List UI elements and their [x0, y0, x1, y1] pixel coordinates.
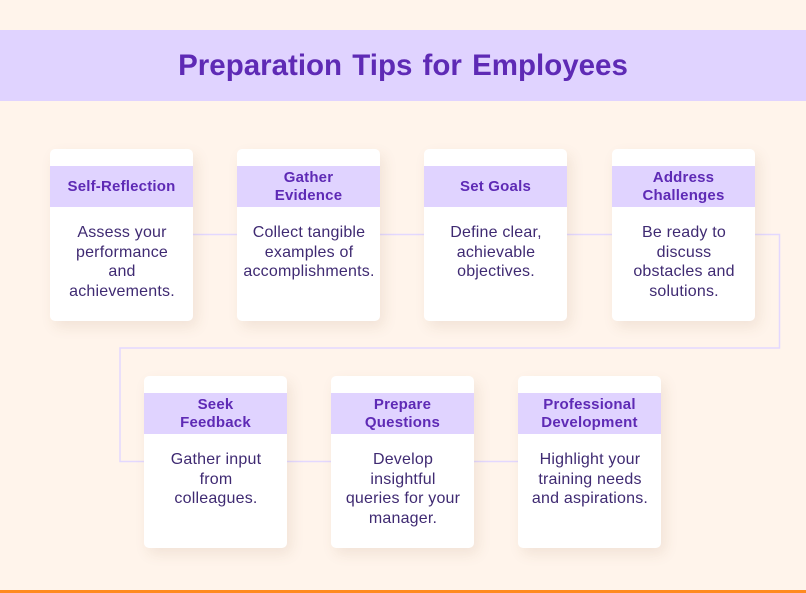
card: Seek Feedback	[144, 376, 287, 548]
card: Prepare Questions: insightful	[370, 470, 436, 488]
card: Gather Evidence	[237, 149, 380, 321]
card: Prepare Questions: manager.	[369, 510, 437, 526]
card: Seek Feedback: colleagues.	[174, 490, 258, 507]
card: Self-Reflection: performance	[76, 244, 168, 260]
card: Gather Evidence: Gather	[284, 168, 333, 186]
card: Address Challenges: Be ready to	[642, 224, 726, 241]
card: Self-Reflection: and	[108, 263, 136, 280]
card: Gather Evidence: Collect tangible	[253, 224, 365, 241]
card: Professional Development: and aspirations.	[532, 490, 648, 507]
card: Set Goals: objectives.	[457, 263, 535, 280]
card: Address Challenges: solutions.	[649, 282, 719, 300]
title banner	[0, 30, 806, 101]
card: Prepare Questions: Questions	[365, 414, 440, 430]
card: Self-Reflection: Self-Reflection	[67, 178, 176, 194]
card: Prepare Questions: queries for your	[346, 490, 460, 507]
card: Set Goals: achievable	[457, 244, 535, 260]
card: Address Challenges: obstacles and	[633, 263, 735, 280]
card: Self-Reflection	[50, 149, 193, 321]
card: Set Goals: Set Goals	[460, 178, 531, 194]
title: Preparation Tips for Employees	[178, 49, 628, 82]
card: Seek Feedback: from	[200, 470, 232, 488]
card: Prepare Questions: Prepare	[374, 396, 431, 412]
card: Prepare Questions: Develop	[373, 451, 433, 468]
card: Professional Development: Highlight your	[540, 451, 640, 468]
card: Address Challenges: Address	[653, 168, 714, 186]
card: Self-Reflection: Assess your	[77, 224, 167, 241]
card: Professional Development: Development	[541, 414, 638, 430]
bottom accent bar	[0, 590, 806, 593]
card: Self-Reflection: achievements.	[69, 282, 175, 300]
card: Professional Development: Professional	[543, 396, 636, 412]
card: Address Challenges: Challenges	[642, 186, 725, 204]
card: Professional Development	[518, 376, 661, 548]
card: Set Goals	[424, 149, 567, 321]
card: Seek Feedback: Gather input	[171, 451, 261, 468]
card: Set Goals: Define clear,	[450, 224, 542, 241]
card: Gather Evidence: examples of	[265, 244, 353, 260]
card: Professional Development: training needs	[538, 470, 642, 488]
card: Address Challenges	[612, 149, 755, 321]
card: Prepare Questions	[331, 376, 474, 548]
card: Seek Feedback: Feedback	[180, 414, 251, 430]
card: Gather Evidence: Evidence	[275, 186, 342, 204]
card: Gather Evidence: accomplishments.	[243, 263, 375, 280]
card: Seek Feedback: Seek	[198, 396, 233, 412]
card: Address Challenges: discuss	[657, 244, 711, 260]
